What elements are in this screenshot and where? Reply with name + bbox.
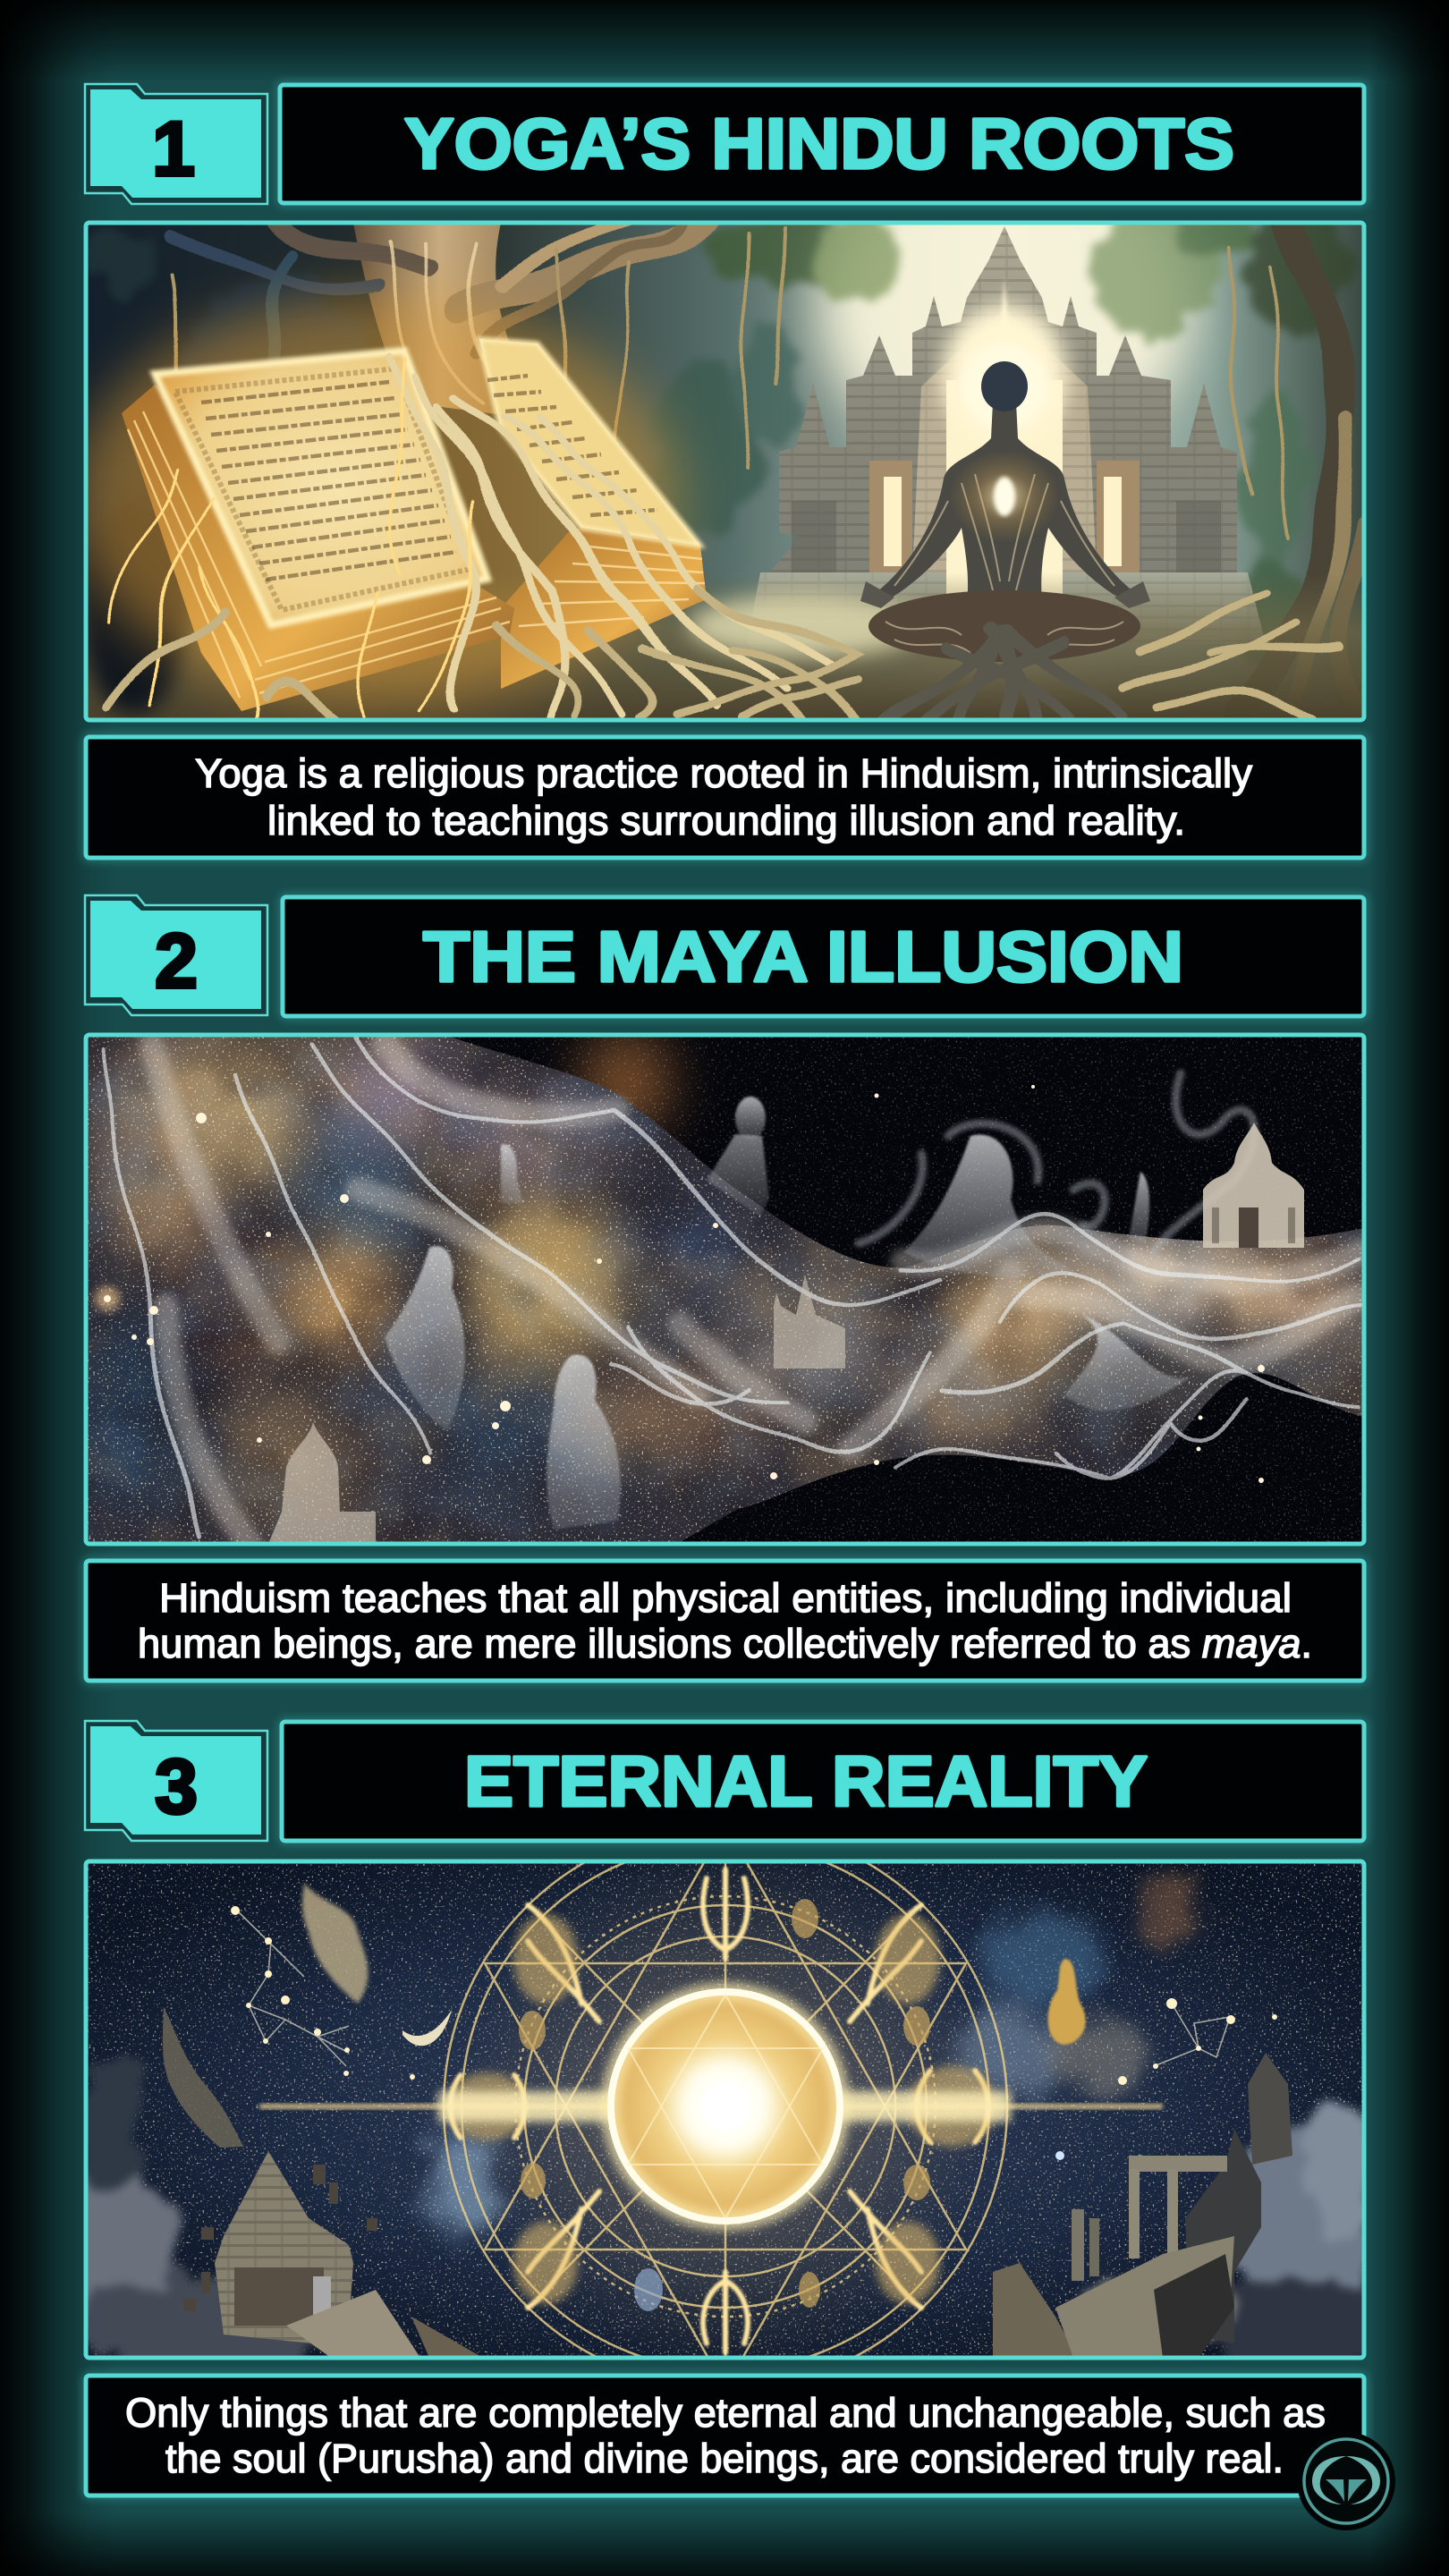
book glow [72,295,680,707]
section 1 illustration frame [86,223,1364,720]
section 3 title bar: ETERNAL REALITY [464,1741,1148,1821]
section 3 number badge [85,1721,267,1841]
book right half [501,528,707,689]
section 3 title bar [282,1722,1364,1841]
section 1 title bar [280,85,1364,203]
smoke top right [859,1073,1254,1252]
section 3 caption [86,2376,1364,2496]
section 2 title bar [283,897,1364,1016]
clouds [54,2057,1395,2375]
mandala ornaments [451,1869,988,2352]
section 1 number badge: 1 [152,106,195,192]
central orb [611,1992,840,2221]
section 1 caption: Yoga is a religious practice rooted in Hinduism, intrinsically [195,750,1252,796]
section 1: Yoga's Hindu Roots [72,84,1364,858]
banyan trunk and branches [354,225,509,414]
section 3 number badge: 3 [155,1744,198,1830]
section 2 title bar: THE MAYA ILLUSION [423,917,1183,996]
nebula veil region [80,1029,1368,1547]
section 3 caption: the soul (Purusha) and divine beings, are considered truly real. [165,2436,1284,2481]
winged angel [302,1883,369,2004]
golden vase [1047,1959,1086,2045]
section 2 illustration: cosmic veil with ghostly figures and palaces [80,1029,1368,1547]
section 2 illustration frame [86,1035,1364,1544]
left temple ruin [183,2151,483,2358]
bright stars [95,1085,1265,1483]
section 1 caption [86,737,1364,858]
roots from figure [886,626,1127,719]
light behind temple [781,225,1227,441]
section 3: Eternal Reality [54,1721,1395,2496]
section 1 caption: linked to teachings surrounding illusion and reality. [267,798,1185,843]
flare [259,2104,1163,2109]
temple gate and windows [913,356,1096,572]
section 1 illustration: scripture, banyan roots, meditating figure, temple [88,225,1361,717]
section 3 illustration: radiant mandala among stars and ruins [54,1825,1395,2388]
palaces [268,1123,1304,1544]
section 2 caption [86,1561,1364,1681]
section 2 number badge: 2 [155,919,198,1004]
mandala [259,1825,1163,2388]
ground roots [107,590,1342,719]
section 1 number badge [85,84,267,204]
section 2 caption: human beings, are mere illusions collectively referred to as maya. [138,1621,1312,1666]
ground [86,572,1364,720]
logo emblem [1297,2432,1395,2530]
section 2 caption: Hinduism teaches that all physical entities, including individual [159,1575,1292,1621]
section 2 number badge [85,895,267,1015]
constellations [237,1911,1230,2066]
veil strands [107,1038,1360,1544]
script lines on pages [201,376,657,580]
right temple ruins [993,2053,1292,2358]
temple [769,226,1237,581]
ghostly figures [385,1097,1190,1530]
book left block [122,385,514,711]
meditating figure [962,343,1047,429]
section 1 title bar: YOGA’S HINDU ROOTS [404,104,1234,183]
foliage [85,201,1346,662]
roots over book [107,358,832,719]
blue nebula [429,1878,1203,2236]
floating rock left [161,2004,242,2147]
orange glow by veil [581,1029,671,1136]
section 3 caption: Only things that are completely eternal and unchangeable, such as [125,2390,1326,2436]
section 2: The Maya Illusion [80,895,1368,1681]
star field over black [86,1035,1364,1544]
section 3 illustration frame [86,1861,1364,2358]
